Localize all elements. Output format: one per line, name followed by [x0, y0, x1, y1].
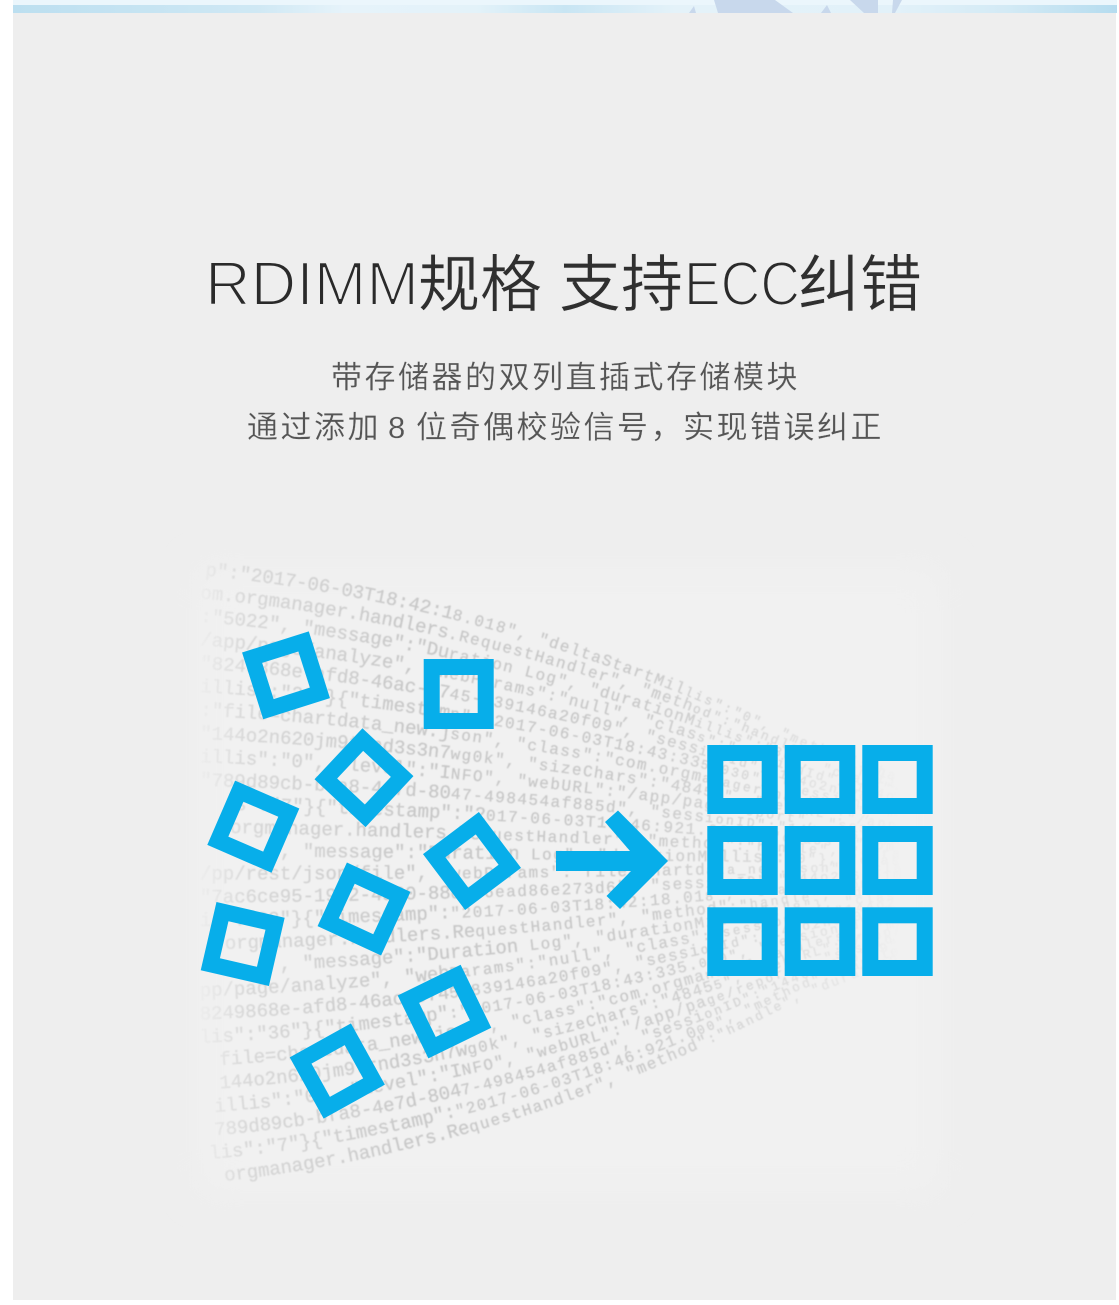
log text fan background: 8249868e-afd8-46ac-9745-839146a20f09", "sessionId":"144o2n620jm9", "level":"INFO", "web" — [214, 924, 838, 1018]
log text fan background: :"file=chartdata_new.json", "class":"com.orgmanager.handlers", "sizeChars":"48455", "web" — [215, 703, 819, 800]
title: 纠错 — [798, 251, 922, 320]
log text fan background: lis":"7"}{"timestamp":"2017-06-03T18:46:921.000", "method":"handle", "class":"com.org" — [214, 965, 856, 1158]
log text fan background: orgmanager.handlers.RequestHandler", "method":"handle", "durationMillis":"0", "level":"I" — [232, 822, 834, 856]
subtitle text — [247, 360, 884, 445]
title: RDIMM — [205, 250, 419, 319]
title: 支持 — [559, 251, 683, 320]
log text fan background: :"5022", "message":"Duration Log", "durationMillis":"36", "class":"com.orgmanager", "size" — [216, 610, 839, 776]
subtitle text: 带存储器的双列直插式存储模块 — [331, 360, 800, 395]
log text fan background: illis":"0", "level":"INFO", "webURL":"/app/page/report", "sessionId":"144o2n620jm9trn" — [217, 952, 839, 1112]
log text fan background: orgmanager.handlers.RequestHandler", "method":"handle", "durationMillis":"0"}, "class":" — [226, 895, 826, 952]
subtitle text: 位奇偶校验信号， — [416, 410, 684, 445]
log text fan background: "7ac6ce95-19e2-4a60-88d7-6ead86e273d6", "sessionID":"144o2n620jm9trnd3s3n7wg0k", "size" — [214, 872, 837, 903]
title: ECC — [684, 250, 800, 319]
log text fan background: orgmanager.handlers.RequestHandler", "method":"handle", "durationMillis":"0", "class" — [226, 973, 856, 1182]
log text fan background: , "message":"Duration Log", "durationMillis":"0"}, "class":"handlers", "webParams":"null" — [282, 842, 832, 866]
title — [205, 250, 922, 320]
log text fan background: , "message":"Duration Log", "durationMillis":"8"}, "class":"com.orgmanager", "level":"IN" — [282, 896, 850, 974]
log text fan background: is":"23"}{"timestamp":"2017-06-03T18:42:18.018", "class":"com.orgmanager", "method":"ha" — [238, 886, 784, 928]
subtitle text: 8 — [388, 410, 408, 445]
ordered 3x3 square grid — [715, 753, 925, 968]
log text fan background: /app/page/analyze", "webParams":"null", "class":"sessionId":"144o2n620jm9trnd3s3n7wg0k"} — [214, 636, 839, 785]
title: 规格 — [418, 251, 542, 320]
log text fan background — [214, 564, 856, 1182]
log text fan background: /pp/rest/json/file", "webParams":"file=chartdata_new.json", "class":"com.orgmanager"} — [214, 862, 837, 884]
log text fan background: "8249868e-afd8-46ac-9745-839146a20f09", "sessionId":"144o2n620jm9", "level":"INFO", "web" — [214, 658, 836, 792]
top banner strip — [13, 0, 1117, 13]
arrow — [556, 810, 668, 909]
log text fan background: "789d89cb-bfa8-4e7d-8047-498454af885d", "sessionID":"144o2n620jm9", "webParams":"null"} — [214, 774, 805, 826]
log text fan background: s":"7"}{"timestamp":"2017-06-03T18:46:921.000", "class":"com.orgmanager", "message":"hand" — [240, 797, 830, 845]
illustration backdrop glow — [200, 570, 940, 1190]
log text fan background: lis":"36"}{"timestamp":"2017-06-03T18:43:335.030", "sessionId":"com.orgmanager.handler" — [214, 926, 837, 1042]
scattered unordered squares — [210, 641, 510, 1108]
log text fan background: om.orgmanager.handlers.RequestHandler", "method":"handle", "durationMillis":"0", "class": — [214, 590, 795, 748]
log text fan background: illis":"0", "level":"INFO", "webURL":"/app/page/report", "sessionId":"144o2n620jm9trnd3" — [216, 750, 851, 826]
subtitle text: 实现错误纠正 — [683, 410, 884, 445]
log text fan background: illis":"36"}{"timestamp":"2017-06-03T18:43:335.030", "sessionId":"com.orgmanager.handler" — [216, 680, 837, 798]
subtitle text: 通过添加 — [247, 410, 381, 445]
log text fan background: 789d89cb-bfa8-4e7d-8047-498454af885d", "sessionID":"144o2n620jm9", "method":"handle"} — [216, 960, 834, 1134]
log text fan background: "144o2n620jm9trnd3s3n7wg0k", "sizeChars":"48455", "webURL":"/app/page/report", "session" — [214, 728, 842, 820]
log text fan background: 144o2n620jm9trnd3s3n7wg0k", "sizeChars":"48455", "webURL":"/app/page/report", "session" — [221, 943, 838, 1088]
log text fan background: p":"2017-06-03T18:42:18.018", "deltaStartMillis":"0", "method":"handle", "durationMillis" — [214, 564, 823, 745]
log text fan background: pp/page/analyze", "webParams":"null", "class":"sessionId":"144o2n620jm9trnd3s3n7wg0k"} — [214, 906, 850, 999]
log text fan background: file=chartdata_new.json", "class":"com.orgmanager.handlers", "message":"Duration Log" — [221, 934, 839, 1065]
